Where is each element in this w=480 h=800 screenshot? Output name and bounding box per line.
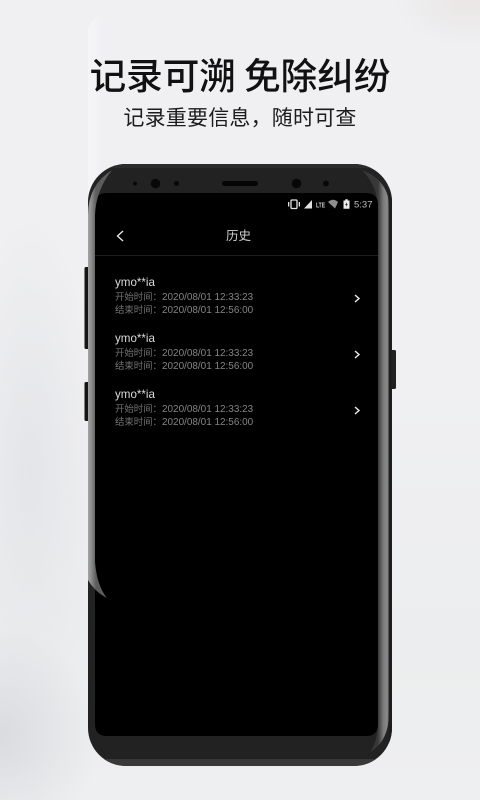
record 1: ymo**ia [115,276,155,288]
subtitle: 记录重要信息，随时可查 [123,102,357,132]
record 2: 2020/08/01 12:56:00 [162,361,253,372]
page title: 历史 [226,229,251,243]
left edge highlight and glass reflection [88,170,112,598]
record 1: 2020/08/01 12:33:23 [162,292,253,303]
record 3 [115,388,360,428]
record 2: ymo**ia [115,332,155,344]
record 3: 2020/08/01 12:56:00 [162,417,253,428]
speaker [222,181,258,186]
record 2: 2020/08/01 12:33:23 [162,348,253,359]
status bar icons: 5:37 [354,200,372,211]
record 2: 结束时间： [115,360,162,371]
header divider [95,255,378,256]
record 3: 结束时间： [115,416,162,427]
status bar icons [288,199,372,211]
screen [95,193,378,736]
status bar icons: LTE [316,202,325,210]
record 2: 开始时间： [115,347,162,358]
camera dots [133,179,329,188]
right edge highlight [362,170,389,752]
phone body [88,164,392,766]
record 2 [115,332,360,372]
title: 记录可溯 免除纠纷 [90,47,390,100]
record 1: 结束时间： [115,304,162,315]
side buttons [84,267,396,421]
record 3: ymo**ia [115,388,155,400]
record 3: 开始时间： [115,403,162,414]
phone [84,164,396,766]
record 1 [115,276,360,316]
record 1: 开始时间： [115,291,162,302]
record 3: 2020/08/01 12:33:23 [162,404,253,415]
back arrow [118,231,123,241]
record 1: 2020/08/01 12:56:00 [162,305,253,316]
